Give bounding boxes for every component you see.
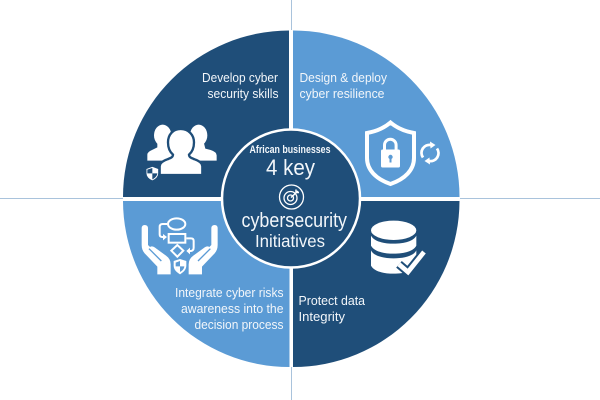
panel: integrate cyber risks [123,201,290,367]
text: design and deploy cyber resilience: Design & deploy [300,70,387,85]
text: integrate cyber risks: Integrate cyber risks [175,285,284,300]
text: develop cyber security skills: security skills [208,86,279,101]
text: Initiatives: Initiatives [255,231,325,251]
text: protect data integrity: Integrity [298,309,345,324]
panel: design and deploy [293,30,460,197]
panel: protect data [293,201,460,367]
icon: shield with padlock [367,122,414,184]
panel: develop skills [123,30,289,197]
icon: sync arrows [422,142,438,164]
icon: database with check [371,221,424,274]
text: 4 key: 4 key [266,155,315,180]
text: protect data integrity: Protect data [298,293,366,308]
text: integrate cyber risks [175,285,284,332]
text: design and deploy cyber resilience [300,70,387,101]
text: integrate cyber risks: awareness into the [181,301,284,316]
icon: hands holding flowchart [142,218,218,274]
icon: people with shield [146,125,217,181]
panel: centre circle [222,130,360,268]
text: integrate cyber risks: decision process [194,317,284,332]
icon: target [280,185,304,209]
text: African businesses: African businesses [250,144,330,156]
text: design and deploy cyber resilience: cyber resilience [300,86,384,101]
text: protect data integrity [298,293,366,324]
text: develop cyber security skills [202,70,279,101]
text: cybersecurity: cybersecurity [242,209,348,232]
text: develop cyber security skills: Develop cyber [202,70,279,85]
